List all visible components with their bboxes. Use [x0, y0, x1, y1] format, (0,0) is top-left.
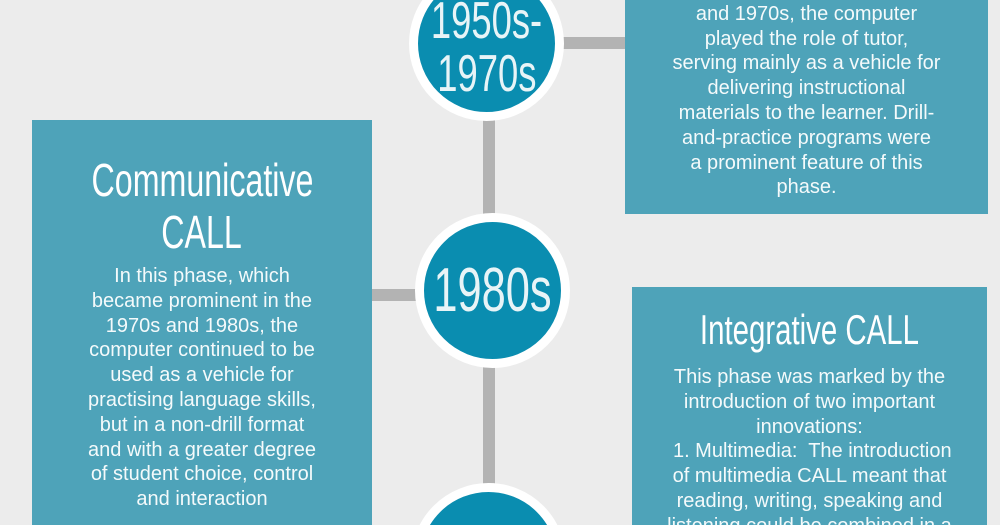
vertical timeline line [483, 100, 495, 500]
text: structural description: delivering instructional [708, 77, 905, 99]
connector: top right [555, 37, 627, 49]
text: structural description: materials to the learner. Drill- [679, 102, 934, 124]
text: integrative description: 1. Multimedia: The introduction [673, 440, 952, 462]
panel: communicative CALL (left) [32, 120, 372, 525]
text: structural description: phase. [776, 176, 837, 198]
text: communicative description: used as a vehicle for [110, 364, 294, 386]
text: structural description: serving mainly as a vehicle for [673, 52, 940, 74]
heading: Communicative CALL: Communicative [91, 154, 313, 206]
text: integrative description: reading, writing, speaking and [677, 490, 942, 512]
text: structural description: a prominent feature of this [690, 152, 923, 174]
circle: bottom (cut off) [420, 483, 558, 525]
label: 1950s-1970s: 1970s [437, 45, 536, 103]
panel: structural CALL (top right) [625, 0, 988, 214]
circle: 1980s [415, 213, 570, 368]
heading: Integrative CALL: Integrative CALL [700, 306, 919, 353]
label: 1950s-1970s [431, 0, 542, 103]
heading: Communicative CALL [91, 154, 313, 258]
text: communicative description: 1970s and 1980s, the [106, 315, 298, 337]
text: integrative description: innovations: [756, 416, 863, 438]
connector: left [370, 289, 420, 301]
label: 1980s: 1980s [433, 256, 552, 325]
text: communicative description: and interaction [136, 488, 268, 510]
text: structural description: and 1970s, the computer [696, 3, 917, 25]
text: communicative description: but in a non-drill format [100, 414, 304, 436]
text: integrative description [667, 366, 952, 525]
panel: integrative CALL (bottom right) [632, 287, 987, 525]
text: integrative description: of multimedia CALL meant that [673, 465, 946, 487]
text: communicative description: of student choice, control [91, 463, 313, 485]
text: communicative description: and with a greater degree [88, 439, 316, 461]
text: communicative description: computer continued to be [89, 339, 315, 361]
text: integrative description: introduction of two important [684, 391, 935, 413]
text: communicative description: became prominent in the [92, 290, 312, 312]
text: structural description: and-practice programs were [682, 127, 931, 149]
text: communicative description [88, 265, 316, 510]
text: structural description [673, 3, 940, 198]
text: structural description: played the role of tutor, [705, 28, 908, 50]
circle: 1950s-1970s [409, 0, 564, 121]
heading: Communicative CALL: CALL [162, 206, 242, 258]
text: integrative description: This phase was marked by the [674, 366, 945, 388]
text: communicative description: practising language skills, [88, 389, 316, 411]
text: communicative description: In this phase, which [114, 265, 290, 287]
